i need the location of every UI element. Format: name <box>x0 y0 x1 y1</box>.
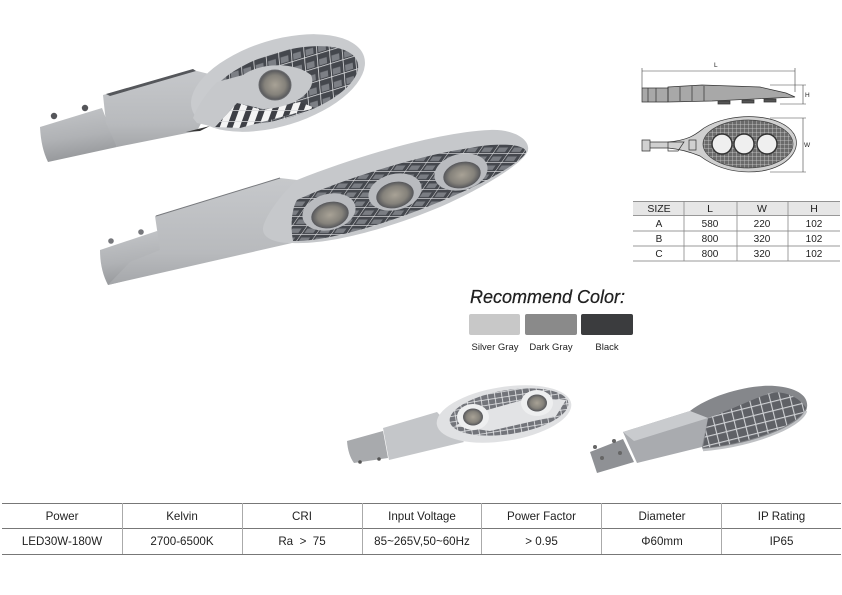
row B <box>656 234 823 245</box>
header row: Diameter <box>638 510 686 523</box>
lamp photo: three-LED street light <box>100 130 528 285</box>
dimension lines <box>642 68 806 172</box>
values row <box>22 535 793 548</box>
row A <box>656 219 823 230</box>
swatch: dark gray <box>525 314 577 353</box>
specification table <box>2 503 841 554</box>
housing body <box>108 178 297 285</box>
row A: 580 <box>702 219 719 230</box>
housing <box>623 411 708 463</box>
header row: SIZE <box>647 203 671 215</box>
row A: A <box>656 219 663 230</box>
heading: Recommend Color: <box>470 287 625 307</box>
size table <box>633 201 840 261</box>
LED lens 3 <box>430 148 492 196</box>
header row: Power Factor <box>507 510 576 523</box>
screws <box>593 445 597 449</box>
row B: 800 <box>702 234 719 245</box>
L label: L <box>714 62 718 69</box>
housing body <box>103 70 225 147</box>
row A: 102 <box>806 219 823 230</box>
LED lens 2 <box>364 168 426 216</box>
row C: 102 <box>806 249 823 260</box>
header row: Input Voltage <box>388 510 456 523</box>
header row: IP Rating <box>758 510 805 523</box>
row B: 102 <box>806 234 823 245</box>
screws <box>358 460 362 464</box>
values row: Φ60mm <box>641 535 683 548</box>
header background <box>633 201 840 215</box>
LED lens left <box>457 404 489 430</box>
swatch: black <box>581 314 633 353</box>
centre plate <box>193 65 312 127</box>
lower white cells <box>215 102 315 128</box>
values row: Ra > 75 <box>278 535 326 548</box>
swatch: dark gray: Dark Gray <box>529 342 573 353</box>
tube arm <box>347 431 388 463</box>
swatch: silver gray <box>469 314 520 353</box>
row A: 220 <box>754 219 771 230</box>
values row: > 0.95 <box>525 535 558 548</box>
H label: H <box>805 92 810 99</box>
row C: 320 <box>754 249 771 260</box>
row B: B <box>656 234 663 245</box>
header row: Power <box>46 510 79 523</box>
lamp photo: single-LED street light <box>40 16 377 162</box>
centre band <box>455 398 566 431</box>
rear fins <box>703 392 806 448</box>
grille <box>446 381 572 443</box>
header row: H <box>810 203 818 215</box>
rim highlight <box>703 411 806 450</box>
lamp photo: two-LED street light <box>347 377 575 464</box>
values row: 2700-6500K <box>150 535 214 548</box>
header row: CRI <box>292 510 312 523</box>
header row: W <box>757 203 767 215</box>
swatch: silver gray: Silver Gray <box>472 342 519 353</box>
LED lens right <box>521 390 553 416</box>
header row: L <box>707 203 713 215</box>
values row: 85~265V,50~60Hz <box>374 535 470 548</box>
header row <box>46 510 805 523</box>
screws <box>108 238 114 244</box>
housing body <box>383 412 464 460</box>
grille <box>292 145 526 241</box>
tube arm <box>590 439 634 473</box>
recommended colour section <box>469 287 633 353</box>
lamp photo: rear view <box>590 386 807 473</box>
rim <box>433 377 575 451</box>
row B: 320 <box>754 234 771 245</box>
top view <box>642 117 796 172</box>
rim <box>179 16 377 150</box>
dimension drawing <box>642 62 811 172</box>
side view <box>642 85 795 102</box>
row C <box>655 249 823 260</box>
W label: W <box>804 142 811 149</box>
tube arm <box>100 231 200 285</box>
lens <box>259 70 291 100</box>
row C: C <box>655 249 663 260</box>
values row: IP65 <box>770 535 793 548</box>
header row: Kelvin <box>166 510 198 523</box>
LED lens 1 <box>298 188 360 236</box>
header row <box>647 203 818 215</box>
swatch: black: Black <box>595 342 619 353</box>
screws <box>51 113 57 119</box>
values row: LED30W-180W <box>22 535 102 548</box>
rim <box>263 130 528 243</box>
tube arm <box>40 108 117 162</box>
grille <box>199 31 367 139</box>
row C: 800 <box>702 249 719 260</box>
leaf outline <box>690 386 807 450</box>
